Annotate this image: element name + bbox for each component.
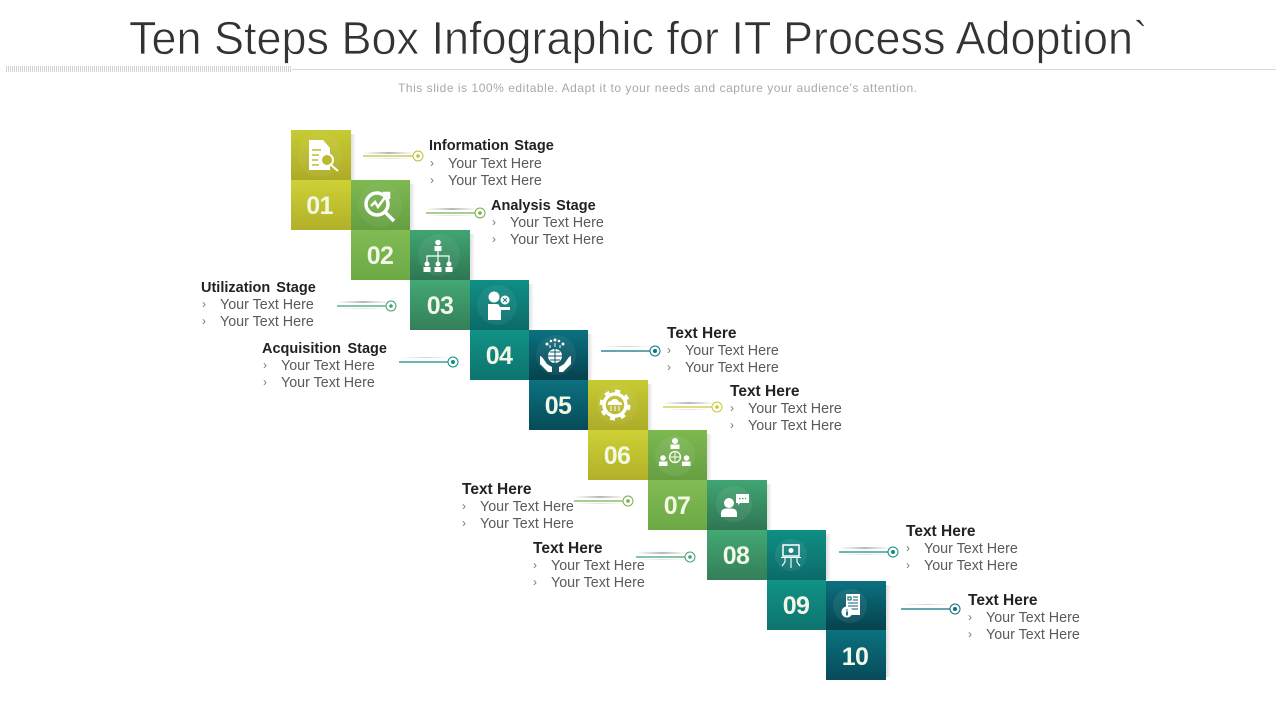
icon: document with info badge — [833, 589, 867, 623]
icon tile 08 — [707, 480, 767, 530]
label: analysis stage: Your Text Here — [510, 215, 604, 231]
step 03 — [410, 230, 475, 330]
number tile 08 — [707, 530, 767, 580]
label: text here 10: Your Text Here — [986, 610, 1080, 626]
label: utilization stage: › — [202, 314, 206, 328]
title: Ten Steps Box Infographic for IT Process Adoption` — [129, 12, 1148, 64]
icon: person with chat bubble — [716, 486, 752, 522]
number 01: 01 — [306, 192, 333, 220]
label: analysis stage: › — [492, 232, 496, 246]
number tile 01 — [291, 180, 351, 230]
label: text here 7: › — [462, 516, 466, 530]
connector 7 — [574, 496, 633, 506]
number tile 03 — [410, 280, 470, 330]
connector 1 — [363, 151, 423, 161]
number 02: 02 — [367, 242, 393, 270]
label: analysis stage: Your Text Here — [510, 232, 604, 248]
connector 5 — [601, 346, 660, 356]
label: text here 6: › — [730, 401, 734, 415]
label: analysis stage: › — [492, 215, 496, 229]
label: utilization stage: Your Text Here — [220, 297, 314, 313]
label: text here 10: › — [968, 610, 972, 624]
label: information stage: Information Stage — [429, 138, 554, 154]
label: acquisition stage: Your Text Here — [281, 375, 375, 391]
connector 3 — [337, 301, 396, 311]
label: text here 9: › — [906, 558, 910, 572]
label: utilization stage: › — [202, 297, 206, 311]
step 02 — [351, 180, 415, 280]
step 01 — [291, 130, 356, 230]
label: text here 7: Your Text Here — [480, 499, 574, 515]
icon tile 09 — [767, 530, 826, 580]
label: text here 7 — [462, 481, 574, 532]
label: text here 10: Your Text Here — [986, 627, 1080, 643]
icon: people around globe — [655, 436, 695, 476]
label: text here 5: › — [667, 343, 671, 357]
label: text here 8 — [533, 540, 645, 591]
header rule — [5, 66, 1276, 72]
label: text here 10: Text Here — [968, 592, 1038, 609]
icon tile 07 — [648, 430, 707, 480]
step 04 — [470, 280, 534, 380]
label: text here 10: › — [968, 627, 972, 641]
icon: hierarchy — [418, 234, 460, 276]
label: text here 5 — [667, 325, 779, 376]
icon tile 02 — [351, 180, 410, 230]
label: text here 8: Your Text Here — [551, 575, 645, 591]
connector 9 — [839, 547, 898, 557]
icon: person presenting globe — [477, 285, 517, 325]
label: text here 7: › — [462, 499, 466, 513]
label: analysis stage: Analysis Stage — [491, 198, 596, 214]
icon tile 04 — [470, 280, 529, 330]
connector 2 — [426, 208, 485, 218]
step 06 — [588, 380, 653, 480]
label: text here 9: › — [906, 541, 910, 555]
label: acquisition stage: › — [263, 358, 267, 372]
label: acquisition stage: Acquisition Stage — [262, 341, 387, 357]
icon: gear with cloud — [597, 385, 637, 425]
number 03: 03 — [427, 292, 453, 320]
number 04: 04 — [486, 342, 513, 370]
label: utilization stage: Utilization Stage — [201, 280, 316, 296]
label: text here 8: › — [533, 575, 537, 589]
label: information stage: › — [430, 173, 434, 187]
connector 4 — [399, 357, 458, 367]
label: information stage: Your Text Here — [448, 156, 542, 172]
subtitle: This slide is 100% editable. Adapt it to your needs and capture your audience's attention. — [398, 81, 917, 95]
number tile 04 — [470, 330, 529, 380]
label: text here 5: › — [667, 360, 671, 374]
number 07: 07 — [664, 492, 690, 520]
icon tile 05 — [529, 330, 588, 380]
step 08 — [707, 480, 772, 580]
label: information stage — [429, 138, 554, 189]
label: analysis stage — [491, 198, 604, 248]
label: text here 6: Your Text Here — [748, 418, 842, 434]
label: text here 6 — [730, 383, 842, 434]
label: text here 8: › — [533, 558, 537, 572]
icon: hands holding globe — [536, 335, 576, 375]
icon tile 01 — [291, 130, 351, 180]
step 09 — [767, 530, 831, 630]
label: text here 10 — [968, 592, 1080, 643]
number 10: 10 — [842, 643, 868, 671]
label: text here 5: Text Here — [667, 325, 737, 342]
icon tile 06 — [588, 380, 648, 430]
step 10 — [826, 581, 891, 680]
icon: document with magnifier — [298, 133, 342, 177]
number tile 06 — [588, 430, 648, 480]
icon tile 10 — [826, 581, 886, 630]
number tile 07 — [648, 480, 707, 530]
number 08: 08 — [723, 542, 750, 570]
label: text here 6: › — [730, 418, 734, 432]
number tile 05 — [529, 380, 588, 430]
label: text here 9 — [906, 523, 1018, 574]
number tile 09 — [767, 580, 826, 630]
icon: monitor with network — [775, 539, 807, 571]
label: text here 9: Your Text Here — [924, 541, 1018, 557]
number 05: 05 — [545, 392, 572, 420]
label: text here 6: Text Here — [730, 383, 800, 400]
label: text here 9: Your Text Here — [924, 558, 1018, 574]
label: information stage: › — [430, 156, 434, 170]
connector 6 — [663, 402, 722, 412]
number 06: 06 — [604, 442, 630, 470]
connector 8 — [636, 552, 695, 562]
label: utilization stage: Your Text Here — [220, 314, 314, 330]
label: text here 5: Your Text Here — [685, 343, 779, 359]
label: text here 9: Text Here — [906, 523, 976, 540]
label: text here 5: Your Text Here — [685, 360, 779, 376]
label: text here 7: Text Here — [462, 481, 532, 498]
step 05 — [529, 330, 593, 430]
number tile 02 — [351, 230, 410, 280]
icon: target analysis magnifier — [358, 183, 402, 227]
connector 10 — [901, 604, 960, 614]
label: text here 6: Your Text Here — [748, 401, 842, 417]
label: acquisition stage — [262, 341, 387, 391]
label: information stage: Your Text Here — [448, 173, 542, 189]
number 09: 09 — [783, 592, 809, 620]
label: text here 7: Your Text Here — [480, 516, 574, 532]
step 07 — [648, 430, 712, 530]
label: acquisition stage: › — [263, 375, 267, 389]
label: utilization stage — [201, 280, 316, 330]
icon tile 03 — [410, 230, 470, 280]
label: text here 8: Text Here — [533, 540, 603, 557]
label: acquisition stage: Your Text Here — [281, 358, 375, 374]
number tile 10 — [826, 630, 886, 680]
label: text here 8: Your Text Here — [551, 558, 645, 574]
